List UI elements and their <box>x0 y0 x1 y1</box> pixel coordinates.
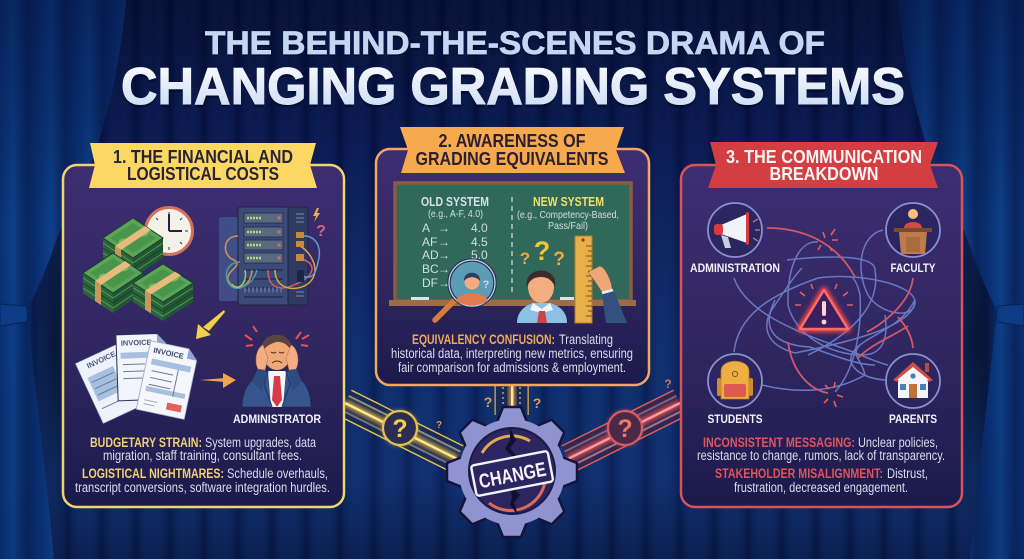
old system column: (e.g., A-F, 4.0) <box>428 208 483 220</box>
banner 2 <box>400 127 625 173</box>
arrow: money to invoices <box>196 310 225 339</box>
old system column: → <box>438 235 450 249</box>
node: students: STUDENTS <box>708 412 762 426</box>
label: administrator: ADMINISTRATOR <box>233 412 321 426</box>
icon: server rack with tangled cables <box>219 207 326 305</box>
title: CHANGING GRADING SYSTEMS <box>121 61 905 119</box>
question badge: left: ? <box>392 415 408 443</box>
title: THE BEHIND-THE-SCENES DRAMA OF <box>205 27 825 63</box>
small question marks: ? <box>484 394 492 410</box>
panel 2: awareness of grading equivalents <box>376 127 649 385</box>
new system column <box>517 194 619 232</box>
small question marks: ? <box>436 420 442 431</box>
node: administration <box>690 203 780 275</box>
old system column: → <box>438 248 450 262</box>
icon: stressed administrator <box>242 326 311 407</box>
panel 3: the communication breakdown <box>681 142 962 507</box>
text: stakeholder misalignment: frustration, decreased engagement. <box>734 480 908 495</box>
question marks: ? <box>520 249 530 268</box>
text: equivalency confusion: EQUIVALENCY CONFUSION: <box>412 332 555 347</box>
connector: left band <box>338 390 464 472</box>
text: budgetary strain: System upgrades, data <box>205 435 316 450</box>
old system column: → <box>438 221 450 235</box>
question marks: ? <box>553 249 565 270</box>
small question marks <box>436 377 672 431</box>
node: parents <box>886 354 940 426</box>
text: budgetary strain: BUDGETARY STRAIN: <box>90 435 202 450</box>
new system column: NEW SYSTEM <box>533 194 604 209</box>
sparks <box>818 229 843 407</box>
banner 1: LOGISTICAL COSTS <box>127 164 279 184</box>
small question marks: ? <box>664 377 672 391</box>
text: stakeholder misalignment: Distrust, <box>887 466 928 481</box>
gear: change <box>447 407 577 537</box>
node: faculty: FACULTY <box>890 261 936 275</box>
node: administration: ADMINISTRATION <box>690 261 780 275</box>
tangled communication lines <box>734 228 915 393</box>
text: equivalency confusion: historical data, interpreting new metrics, ensuring <box>391 346 633 361</box>
old system column: → <box>438 276 450 290</box>
new system column: Pass/Fail) <box>548 220 588 232</box>
banner 3: 3. THE COMMUNICATION <box>726 147 922 167</box>
icon: money stacks <box>83 218 193 321</box>
old system column: OLD SYSTEM <box>421 194 489 209</box>
old system column: AF <box>422 235 437 249</box>
icon: confused person <box>517 270 567 323</box>
old system column: 4.0 <box>471 221 488 235</box>
question marks <box>520 236 565 270</box>
text: equivalency confusion <box>391 332 633 375</box>
left curtain <box>0 0 126 559</box>
old system column: AD <box>422 248 439 262</box>
text: budgetary strain <box>90 435 316 463</box>
icon: magnifying glass: ? <box>483 279 490 291</box>
title: CHANGING GRADING SYSTEMS <box>121 58 905 116</box>
node: parents: PARENTS <box>889 412 937 426</box>
title <box>121 25 905 119</box>
chalkboard <box>389 183 636 306</box>
banner 3: BREAKDOWN <box>770 164 878 184</box>
text: inconsistent messaging <box>697 435 945 463</box>
text: stakeholder misalignment <box>715 466 928 495</box>
icon: warning triangle <box>795 284 853 329</box>
stamp: change: CHANGE <box>477 459 548 493</box>
icon: magnifying glass <box>435 260 495 320</box>
old system column: DF <box>422 276 438 290</box>
banner 1 <box>89 143 317 188</box>
text: logistical nightmares: LOGISTICAL NIGHTMARES: <box>82 466 224 481</box>
connector: right band <box>561 390 687 472</box>
arrow: invoices to administrator <box>200 373 236 388</box>
question badge: left <box>382 410 418 446</box>
banner 2: GRADING EQUIVALENTS <box>416 149 608 169</box>
banner 2: 2. AWARENESS OF <box>438 131 586 151</box>
text: logistical nightmares <box>75 466 330 495</box>
small question marks: ? <box>533 395 541 411</box>
new system column: (e.g., Competency-Based, <box>517 209 619 221</box>
question badge: right: ? <box>617 415 633 443</box>
icon: clock <box>146 208 192 254</box>
right curtain <box>898 0 1024 559</box>
text: budgetary strain: migration, staff training, consultant fees. <box>103 448 302 463</box>
icon: server rack with tangled cables: ? <box>316 223 326 240</box>
text: inconsistent messaging: resistance to change, rumors, lack of transparency. <box>697 448 945 463</box>
old system column: → <box>438 262 450 276</box>
title: THE BEHIND-THE-SCENES DRAMA OF <box>205 25 825 61</box>
banner 3 <box>708 142 938 188</box>
old system column: A <box>422 221 430 235</box>
node: faculty <box>886 203 940 275</box>
text: inconsistent messaging: INCONSISTENT MESSAGING: <box>703 435 855 450</box>
question marks: ? <box>534 236 550 266</box>
text: logistical nightmares: transcript conversions, software integration hurdles. <box>75 480 330 495</box>
old system column: BC <box>422 262 439 276</box>
connector: centre band <box>494 385 529 415</box>
invoice sheet left: INVOICE <box>85 349 117 370</box>
old system column: 4.5 <box>471 235 488 249</box>
text: stakeholder misalignment: STAKEHOLDER MISALIGNMENT: <box>715 466 883 481</box>
panel 1: financial and logistical costs <box>63 143 344 507</box>
icon: ruler and hand <box>575 236 627 323</box>
node: students <box>708 354 762 426</box>
text: inconsistent messaging: Unclear policies, <box>858 435 938 450</box>
invoice sheet right: INVOICE <box>153 346 185 361</box>
icon: invoices <box>75 333 199 423</box>
text: equivalency confusion: fair comparison for admissions & employment. <box>398 360 626 375</box>
old system column <box>421 194 489 290</box>
invoice sheet middle: INVOICE <box>121 338 152 348</box>
banner 1: 1. THE FINANCIAL AND <box>113 147 293 167</box>
text: equivalency confusion: Translating <box>559 332 613 347</box>
old system column: 5.0 <box>471 248 488 262</box>
text: logistical nightmares: Schedule overhauls, <box>227 466 328 481</box>
question badge: right <box>607 410 643 446</box>
